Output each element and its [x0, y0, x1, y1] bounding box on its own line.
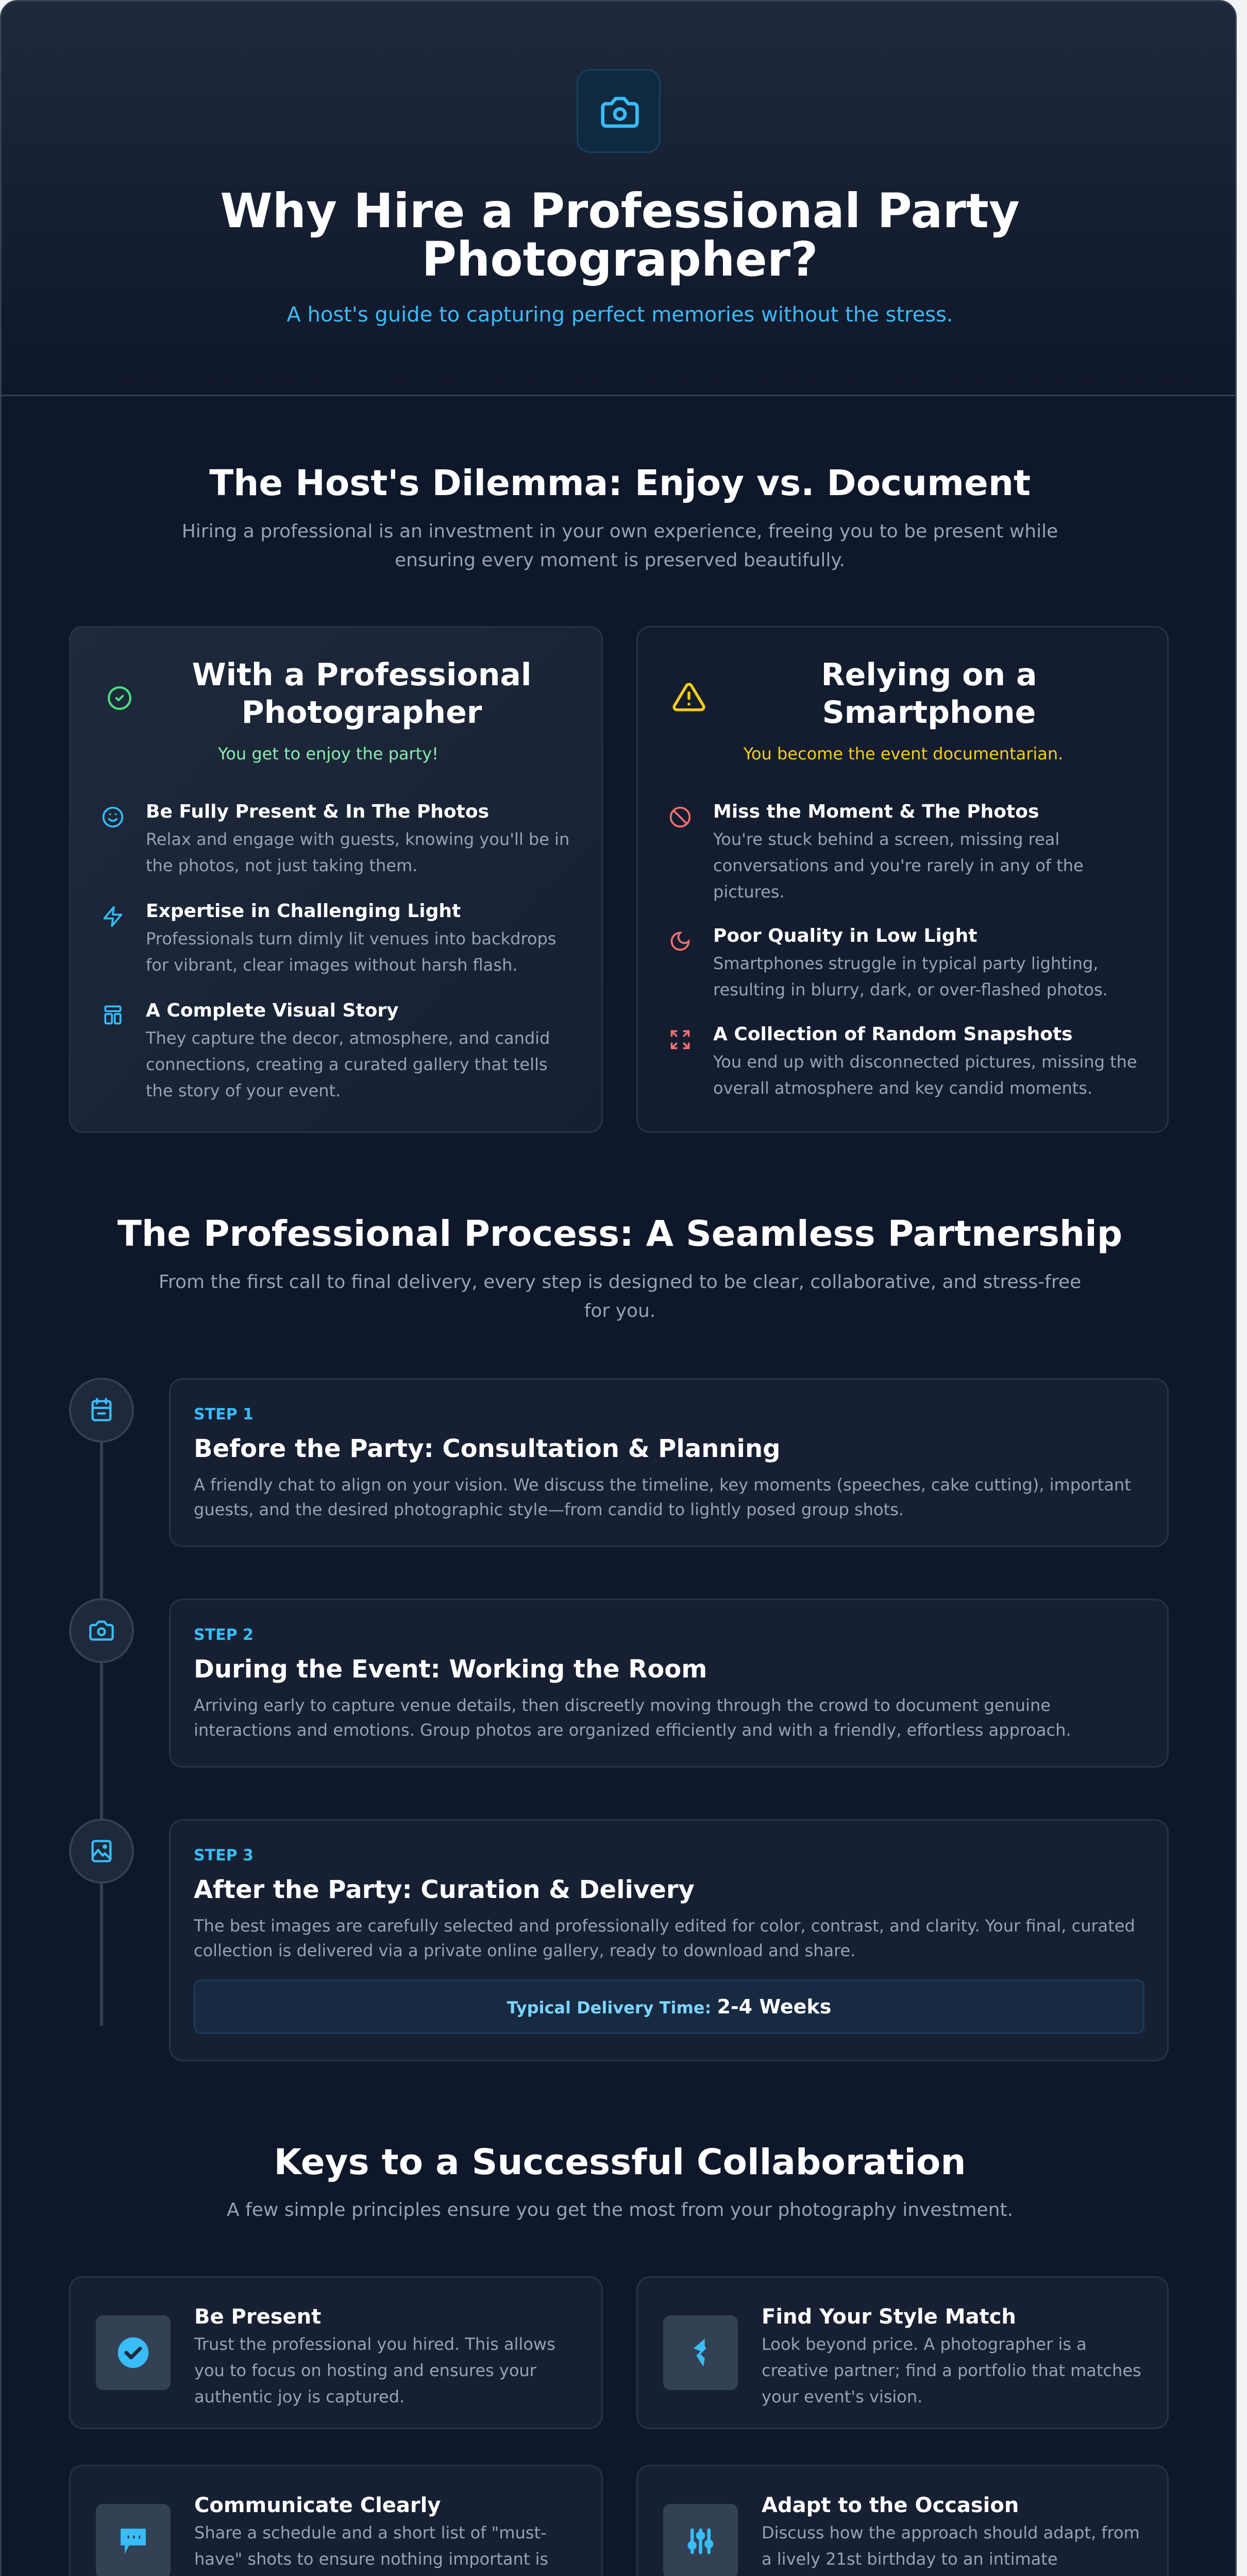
- icon: camera badge: [577, 69, 661, 153]
- item: miss moment: pictures.: [713, 882, 785, 902]
- panel: be present: you to focus on hosting and ensures your: [194, 2361, 536, 2380]
- text: dilemma intro: ensuring every moment is preserved beautifully.: [395, 550, 845, 571]
- item: present: Be Fully Present & In The Photos: [146, 801, 489, 822]
- item: snapshots: A Collection of Random Snapshots: [713, 1024, 1073, 1045]
- heading: dilemma: The Host's Dilemma: Enjoy vs. Document: [209, 463, 1031, 504]
- item: light: Professionals turn dimly lit venues into backdrops: [146, 929, 556, 948]
- panel: be present: Be Present: [194, 2305, 321, 2329]
- item: present: Relax and engage with guests, knowing you'll be in: [146, 829, 569, 849]
- panel: step 1: [169, 1378, 1169, 1547]
- timeline line: [100, 1410, 103, 2026]
- callout: delivery time: [194, 1979, 1144, 2034]
- panel: style match: creative partner; find a portfolio that matches: [762, 2361, 1141, 2380]
- tagline: You get to enjoy the party!: [218, 744, 439, 764]
- panel: step 1: Before the Party: Consultation & Planning: [194, 1434, 780, 1463]
- item: miss moment: [670, 801, 1084, 902]
- item: low light: Poor Quality in Low Light: [713, 925, 977, 946]
- text: process intro: [159, 1272, 1081, 1321]
- item: low light: Smartphones struggle in typical party lighting,: [713, 954, 1098, 973]
- panel: adapt: a lively 21st birthday to an intimate: [762, 2549, 1057, 2569]
- panel: communicate: Communicate Clearly: [194, 2494, 441, 2517]
- text: dilemma intro: [182, 521, 1058, 571]
- panel: style match: Look beyond price. A photographer is a: [762, 2334, 1087, 2354]
- panel: step 2: STEP 2: [194, 1626, 254, 1644]
- heading: With a Professional: [192, 657, 531, 693]
- item: light: for vibrant, clear images without harsh flash.: [146, 955, 517, 975]
- icon: step2 camera: [69, 1598, 134, 1663]
- item: snapshots: [671, 1024, 1137, 1098]
- panel: step 2: [169, 1599, 1169, 1768]
- panel: step 1: A friendly chat to align on your vision. We discuss the timeline, key moments (speeches, cake cutting), important: [194, 1475, 1131, 1495]
- heading: Smartphone: [822, 694, 1036, 731]
- item: miss moment: Miss the Moment & The Photos: [713, 801, 1039, 822]
- panel: step 3: After the Party: Curation & Delivery: [194, 1875, 695, 1904]
- title: [220, 183, 1020, 287]
- panel: communicate: Share a schedule and a short list of "must-: [194, 2523, 547, 2543]
- item: present: the photos, not just taking them.: [146, 856, 417, 875]
- panel: be present: [69, 2276, 603, 2429]
- icon: step3 image: [69, 1819, 134, 1884]
- panel: step 3: The best images are carefully selected and professionally edited for color, contrast, and clarity. Your final, curated: [194, 1916, 1135, 1936]
- text: dilemma intro: Hiring a professional is an investment in your own experience, freeing you to be present while: [182, 521, 1058, 542]
- heading: process: The Professional Process: A Seamless Partnership: [117, 1213, 1122, 1255]
- panel: be present: authentic joy is captured.: [194, 2387, 405, 2406]
- icon: step1 calendar: [69, 1378, 134, 1443]
- panel: adapt: Adapt to the Occasion: [762, 2494, 1019, 2517]
- panel: step 2: During the Event: Working the Room: [194, 1655, 707, 1684]
- panel: style match: [636, 2276, 1169, 2429]
- title: Why Hire a Professional Party: [220, 183, 1020, 239]
- item: low light: [671, 925, 1108, 999]
- icon: warning: [672, 683, 705, 711]
- panel: step 1: guests, and the desired photographic style—from candid to lightly posed group shots.: [194, 1500, 904, 1519]
- item: present: [102, 801, 569, 875]
- heading: Relying on a: [821, 657, 1037, 693]
- subtitle: A host's guide to capturing perfect memories without the stress.: [287, 303, 953, 327]
- panel: communicate: [69, 2465, 603, 2576]
- item: story: They capture the decor, atmosphere, and candid: [146, 1028, 550, 1048]
- text: process intro: From the first call to final delivery, every step is designed to be clear, collaborative, and stress-free: [159, 1272, 1081, 1293]
- panel: with a professional: [69, 626, 603, 1133]
- tagline: You become the event documentarian.: [744, 744, 1063, 764]
- panel: step 3: [169, 1819, 1169, 2061]
- panel: adapt: [636, 2465, 1169, 2576]
- text: keys intro: A few simple principles ensure you get the most from your photography investment.: [227, 2199, 1013, 2221]
- panel: step 2: Arriving early to capture venue details, then discreetly moving through the crowd to document genuine: [194, 1696, 1051, 1715]
- item: low light: resulting in blurry, dark, or over-flashed photos.: [713, 980, 1108, 999]
- callout: delivery time: Typical Delivery Time: 2-4 Weeks: [507, 1995, 831, 2018]
- panel: step 1: STEP 1: [194, 1405, 254, 1423]
- panel: adapt: Discuss how the approach should adapt, from: [762, 2523, 1140, 2543]
- icon: check circle: [108, 686, 131, 710]
- header: [2, 2, 1238, 396]
- panel: step 3: STEP 3: [194, 1846, 254, 1865]
- item: miss moment: conversations and you're rarely in any of the: [713, 856, 1084, 875]
- item: snapshots: You end up with disconnected pictures, missing the: [713, 1052, 1137, 1072]
- item: miss moment: You're stuck behind a screen, missing real: [713, 829, 1059, 849]
- item: story: [104, 1000, 550, 1100]
- panel: be present: Trust the professional you hired. This allows: [194, 2334, 555, 2354]
- item: light: [103, 901, 556, 975]
- item: story: connections, creating a curated gallery that tells: [146, 1055, 548, 1074]
- panel: step 3: collection is delivered via a private online gallery, ready to download and share.: [194, 1941, 855, 1960]
- title: Photographer?: [422, 232, 818, 287]
- panel: step 2: interactions and emotions. Group photos are organized efficiently and with a friendly, effortless approach.: [194, 1720, 1071, 1740]
- panel: communicate: have" shots to ensure nothing important is: [194, 2549, 548, 2569]
- panel: style match: Find Your Style Match: [762, 2305, 1016, 2329]
- text: process intro: for you.: [584, 1300, 655, 1321]
- heading: keys: Keys to a Successful Collaboration: [274, 2142, 966, 2183]
- panel: style match: your event's vision.: [762, 2387, 922, 2406]
- heading: Photographer: [242, 694, 482, 731]
- item: story: A Complete Visual Story: [146, 1000, 399, 1021]
- panel: smartphone: [636, 626, 1169, 1133]
- heading: [192, 657, 531, 731]
- item: light: Expertise in Challenging Light: [146, 901, 461, 922]
- heading: [821, 657, 1037, 731]
- item: snapshots: overall atmosphere and key candid moments.: [713, 1078, 1092, 1098]
- item: story: the story of your event.: [146, 1081, 341, 1100]
